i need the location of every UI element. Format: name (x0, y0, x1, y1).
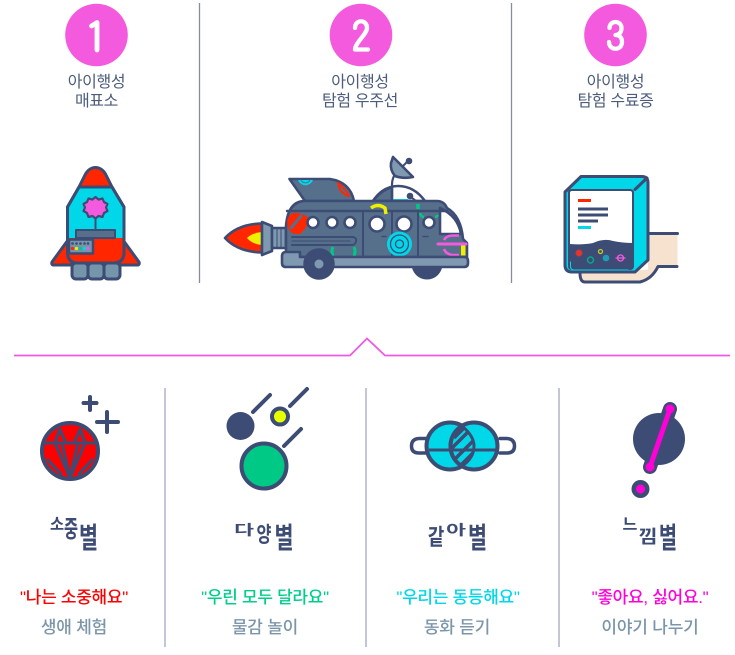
activity: 생애 체험: 생애 체험 (41, 618, 107, 637)
book (565, 176, 648, 272)
title: 느낌별: 별 (659, 522, 677, 555)
title: 소중별 (50, 517, 98, 555)
icon: rocket (52, 168, 139, 279)
title: 다양별: 별 (274, 523, 294, 555)
title: 소중별: 소 (50, 517, 64, 534)
step 3 label: 탐험 수료증 (578, 92, 653, 110)
title: 느낌별 (623, 516, 677, 555)
title: 다양별 (234, 522, 294, 555)
base bar (282, 252, 468, 267)
step 1 label: 아이행성 (68, 74, 125, 91)
flame (225, 224, 262, 252)
nozzle (262, 222, 286, 255)
hood fin (290, 179, 354, 201)
title: 같아별 (428, 522, 487, 555)
step 2 label: 탐험 우주선 (322, 92, 398, 110)
step 1 label: 매표소 (75, 92, 118, 110)
title: 소중별: 중 (64, 517, 78, 543)
quote: 동등해요: "우리는 동등해요" (396, 588, 520, 607)
title: 다양별: 다 (234, 522, 254, 538)
title: 같아별: 별 (468, 523, 487, 555)
step 1 badge (65, 4, 128, 66)
icon: exclamation planet (632, 404, 685, 498)
title: 다양별: 양 (257, 523, 271, 548)
icon: certificate in hand (565, 176, 678, 282)
dome and dish (373, 157, 425, 202)
wheel under bar (412, 248, 442, 280)
step 2 badge (330, 4, 392, 66)
step 2 label: 아이행성 (331, 74, 389, 91)
quote: 소중: "나는 소중해요" (20, 588, 128, 607)
title: 같아별: 같 (428, 525, 445, 551)
activity: 물감 놀이: 물감 놀이 (232, 618, 298, 637)
step 3 badge (584, 4, 647, 66)
title: 같아별: 아 (446, 522, 466, 538)
body (286, 201, 467, 257)
icon: diverse planets (226, 389, 307, 488)
quote: 좋아요 싫어요: "좋아요, 싫어요." (592, 588, 709, 607)
hand (580, 234, 678, 282)
activity: 이야기 나누기: 이야기 나누기 (601, 618, 699, 637)
icon: space vehicle (225, 157, 468, 280)
icon: overlapping planets (412, 422, 514, 470)
title: 느낌별: 느 (623, 516, 638, 534)
activity: 동화 듣기: 동화 듣기 (424, 618, 490, 637)
icon: ruby planet (42, 397, 118, 479)
step 3 label: 아이행성 (587, 74, 644, 91)
quote: 모두 달라요: "우린 모두 달라요" (201, 588, 329, 607)
title: 느낌별: 낌 (638, 527, 658, 548)
wheel (304, 249, 334, 279)
title: 소중별: 별 (79, 523, 98, 555)
